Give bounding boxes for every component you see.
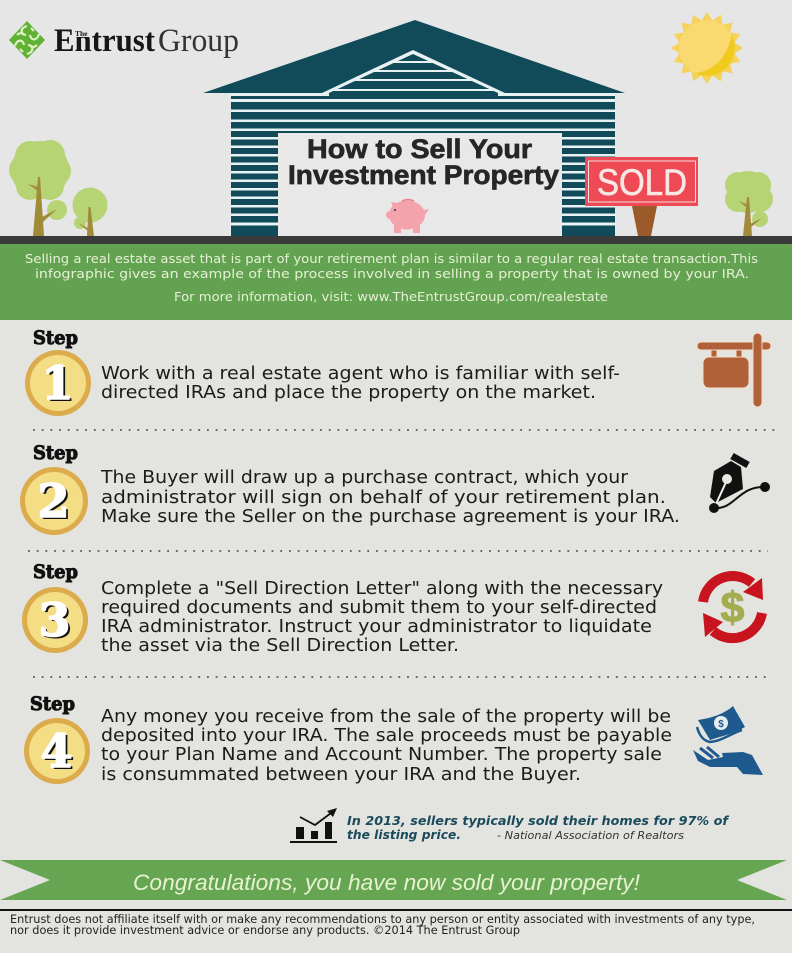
icon: sun: [671, 12, 743, 84]
step 4 text: Any money you receive from the sale of the property will be: [101, 706, 671, 727]
disclaimer: Entrust does not affiliate itself with or make any recommendations to any person or entity associated with investments of any type,: [10, 912, 755, 926]
step 3 text: [101, 578, 663, 656]
tree: large left: [9, 140, 71, 236]
logo: The Entrust Group: The: [75, 29, 88, 38]
step 3 text: IRA administrator. Instruct your administrator to liquidate: [101, 616, 652, 637]
callout: market statistic: In 2013, sellers typically sold their homes for 97% of: [347, 813, 730, 828]
step 1 text: directed IRAs and place the property on the market.: [101, 382, 596, 403]
icon: rising bar chart: [290, 808, 337, 843]
step 4 text: deposited into your IRA. The sale proceeds must be payable: [101, 725, 672, 746]
icon: green diamond logo mark: [9, 21, 45, 59]
ground bar: [0, 236, 792, 244]
step 3 text: Complete a "Sell Direction Letter" along with the necessary: [101, 578, 663, 599]
title: Investment Property: [288, 160, 559, 190]
sign post: [632, 206, 657, 236]
icon: pen nib with bezier curve: [709, 456, 770, 513]
panel: step 1: [25, 327, 771, 416]
icon: piggy bank: [386, 200, 429, 233]
step 1 badge: 1: [41, 356, 74, 410]
step 3 text: the asset via the Sell Direction Letter.: [101, 635, 459, 656]
step 1 text: [101, 363, 620, 403]
wall background: [231, 93, 615, 236]
dotted divider: [28, 550, 768, 552]
step 1 badge: [25, 350, 91, 416]
wall stripes: [231, 102, 615, 236]
step 2 text: Make sure the Seller on the purchase agreement is your IRA.: [101, 506, 680, 527]
step 3 badge: 3: [38, 593, 71, 647]
panel: intro green band: infographic gives an example of the process involved in selling a property that is owned by your IRA.: [35, 266, 749, 281]
title: [288, 134, 559, 190]
panel: intro green band: Selling a real estate asset that is part of your retirement plan is similar to a regular real estate transaction.This: [25, 251, 758, 266]
step 1 label: Step: [33, 327, 78, 349]
callout: market statistic: the listing price.: [347, 827, 461, 842]
icon: red arrows around dollar: $: [721, 584, 745, 632]
banner: congratulations: [0, 860, 787, 900]
step 4 text: [101, 706, 672, 785]
icon: hand holding money: [693, 706, 763, 775]
step 3 badge: 3: [41, 595, 73, 649]
tree: right: [725, 171, 773, 236]
icon: hanging sign: [697, 333, 771, 407]
panel: step 4: [24, 693, 763, 785]
tree: small left: [72, 188, 108, 236]
step 4 label: Step: [30, 693, 75, 715]
dotted divider: [33, 429, 775, 431]
step 2 badge: 2: [37, 474, 70, 528]
callout: market statistic: [290, 808, 730, 843]
panel: intro green band: [0, 244, 792, 320]
icon: hand holding money: $: [718, 719, 724, 730]
roof gable lines and stripes: [231, 50, 615, 99]
step 1 text: Work with a real estate agent who is familiar with self-: [101, 363, 620, 384]
disclaimer: [10, 912, 755, 937]
step 2 text: administrator will sign on behalf of your retirement plan.: [101, 487, 666, 508]
roof: [203, 20, 625, 93]
logo: The Entrust Group: [9, 21, 239, 59]
logo: The Entrust Group: Group: [158, 23, 239, 59]
logo: The Entrust Group: Entrust: [54, 23, 155, 59]
step 4 text: is consummated between your IRA and the Buyer.: [101, 764, 581, 785]
dotted divider: [33, 676, 770, 678]
icon: red arrows around dollar: [703, 576, 763, 638]
step 3 text: required documents and submit them to your self-directed: [101, 597, 657, 618]
step 3 badge: [22, 587, 88, 653]
step 2 badge: [20, 467, 88, 535]
step 4 badge: 4: [43, 726, 75, 780]
step 3 label: Step: [33, 561, 78, 583]
step 2 badge: 2: [40, 476, 72, 530]
sold sign: SOLD: [597, 162, 687, 203]
step 4 badge: 4: [40, 724, 73, 778]
banner: congratulations: Congratulations, you have now sold your property!: [133, 870, 640, 895]
sold sign: [585, 157, 698, 236]
callout: market statistic: - National Association of Realtors: [497, 829, 684, 842]
step 2 label: Step: [33, 442, 78, 464]
house: [203, 20, 625, 236]
step 4 badge: [24, 718, 90, 784]
panel: step 2: [20, 442, 770, 535]
disclaimer: nor does it provide investment advice or endorse any products. ©2014 The Entrust Group: [10, 923, 520, 937]
footer rule: [0, 909, 792, 911]
step 2 text: [100, 467, 680, 527]
step 2 text: The Buyer will draw up a purchase contract, which your: [100, 467, 629, 488]
step 4 text: to your Plan Name and Account Number. The property sale: [101, 744, 662, 765]
step 1 badge: 1: [44, 358, 76, 412]
title: How to Sell Your: [307, 134, 533, 164]
garage door panel: [278, 133, 562, 236]
panel: intro green band: For more information, visit: www.TheEntrustGroup.com/realestate: [174, 289, 608, 304]
panel: step 3: [22, 561, 763, 656]
